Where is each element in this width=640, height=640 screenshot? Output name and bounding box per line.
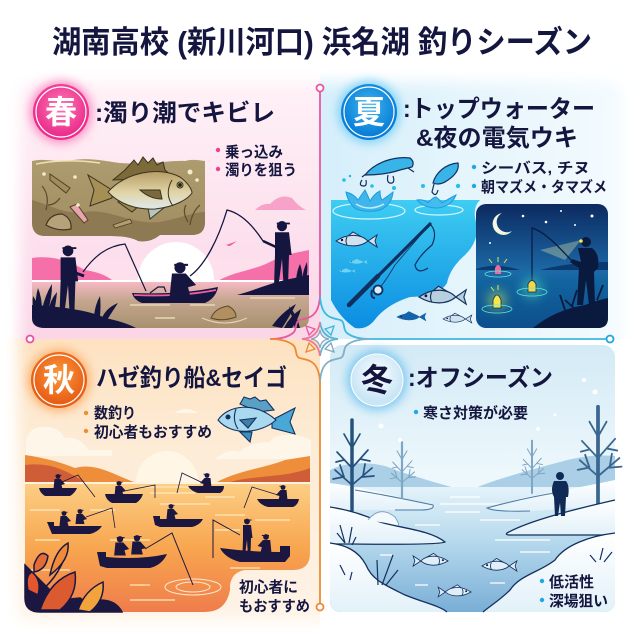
badge: summer (338, 81, 400, 143)
icon: splash right (417, 195, 456, 208)
heading: summer (403, 96, 595, 152)
autumn lake scene (25, 451, 310, 612)
badge: autumn (28, 349, 90, 411)
angler in boat (170, 262, 196, 296)
trees (333, 420, 374, 510)
bullets: summer: シーバス, チヌ (481, 160, 590, 177)
landscape with anglers (32, 196, 309, 328)
shore left (32, 305, 136, 328)
autumn foliage (25, 543, 122, 612)
badge: spring: 春 (45, 94, 77, 130)
badge: winter: 冬 (361, 362, 393, 398)
icon: lure large (360, 158, 414, 186)
callout: beginner note: もおすすめ (239, 598, 310, 615)
heading: winter: :オフシーズン (408, 364, 553, 392)
bullets: summer (472, 160, 607, 196)
angler silhouette (552, 472, 569, 516)
boat 7 (97, 533, 193, 585)
central ornament and dividers (26, 84, 614, 610)
heading: spring: :濁り潮でキビレ (95, 100, 275, 127)
bullets: spring: 乗っ込み (225, 144, 283, 161)
fish (413, 553, 517, 597)
fish group (336, 232, 472, 323)
icon: bream fish (88, 157, 192, 219)
bullets: autumn: 数釣り (94, 404, 136, 422)
title: 湖南高校 (新川河口) 浜名湖 釣りシーズン (52, 25, 592, 60)
bullets: winter bottom (540, 574, 608, 610)
boat 3 (177, 473, 224, 493)
bullets: spring (216, 144, 297, 179)
panel: summer (18, 81, 622, 620)
heading: summer: :トップウォーター (403, 96, 595, 123)
heading: autumn: ハゼ釣り船&セイゴ (96, 364, 287, 392)
boats and anglers (39, 473, 299, 585)
icon: lure small (432, 163, 458, 195)
icon: blue fish (218, 397, 295, 442)
panel: winter (330, 345, 622, 612)
submerged fish (211, 306, 236, 320)
icon: fishing rod (349, 224, 435, 305)
boat (132, 287, 218, 303)
winter scene (330, 378, 622, 612)
grass and reeds (337, 525, 612, 585)
badge: winter (347, 350, 407, 410)
badge: spring (30, 81, 92, 143)
clouds (26, 409, 311, 459)
icon: splash left (346, 190, 393, 211)
panel: spring (20, 81, 340, 362)
bullets: autumn (84, 404, 212, 441)
boat 1 (39, 474, 95, 497)
bullets: autumn: 初心者もおすすめ (94, 424, 212, 441)
back snow banks (330, 483, 433, 510)
callout: beginner note: 初心者に (239, 579, 298, 596)
shore right (237, 275, 309, 295)
night fishing inset (476, 204, 608, 328)
bullets: winter bottom: 低活性 (549, 574, 594, 591)
shore and angler silhouette (533, 298, 608, 328)
bullets: winter bottom: 深場狙い (549, 593, 608, 610)
callout: beginner note (239, 579, 310, 615)
bird (226, 241, 237, 246)
snow flakes (378, 378, 598, 442)
boat 2 (105, 481, 155, 503)
bullet: winter top: 寒さ対策が必要 (423, 404, 528, 422)
angler right (274, 221, 292, 283)
bullets: spring: 濁りを狙う (225, 162, 297, 179)
badge: summer: 夏 (353, 94, 385, 130)
panel: autumn (18, 320, 340, 620)
angler left (60, 246, 78, 311)
boat 4 (244, 485, 299, 508)
boat 8 (213, 519, 290, 562)
boat 6 (153, 504, 203, 527)
water and rod illustration (331, 158, 608, 328)
heading: summer: &夜の電気ウキ (416, 125, 578, 152)
murky water illustration (32, 157, 205, 241)
boat 5 (47, 508, 115, 534)
cloud (255, 196, 306, 210)
front snow banks (330, 507, 445, 544)
badge: autumn: 秋 (43, 362, 75, 398)
bullets: summer: 朝マズメ・タマズメ (481, 178, 607, 196)
